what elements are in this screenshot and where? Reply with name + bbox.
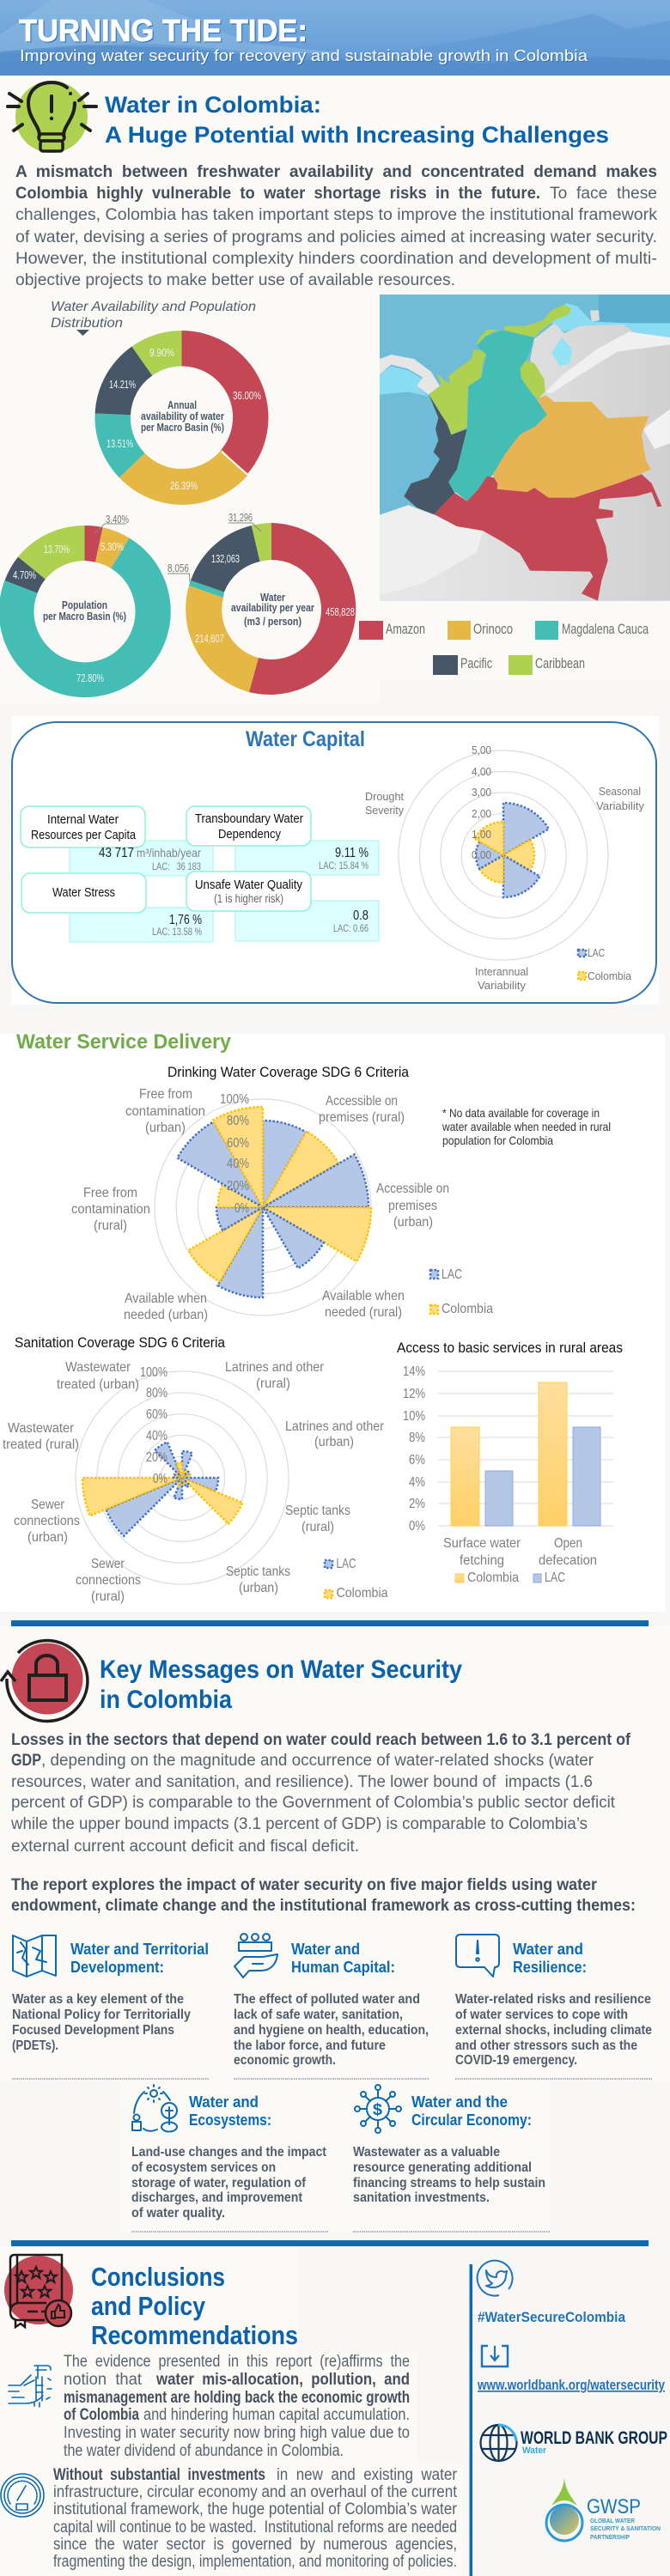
radar chart: sanitation: Wastewater <box>65 1360 131 1375</box>
heading: conclusions <box>91 2262 298 2350</box>
bar chart: access to basic services: 2% <box>409 1497 425 1511</box>
sidebar: links and logos <box>469 2261 667 2576</box>
basin: Amazon <box>434 474 661 601</box>
intro paragraph: A mismatch between freshwater availability and concentrated demand makes <box>15 163 657 181</box>
donut: annual availability of water: 14.21% <box>109 378 136 391</box>
conclusion paragraph one: and hindering human capital accumulation. <box>143 2406 410 2424</box>
card: water and ecosystems: of water quality. <box>131 2206 225 2221</box>
icon: download <box>482 2346 508 2366</box>
icon: book with stars <box>4 2255 73 2327</box>
card: transboundary water dependency <box>186 806 379 875</box>
card: unsafe water quality: Unsafe Water Quality <box>195 878 302 892</box>
card: water and resilience: Water and <box>513 1941 583 1958</box>
radar chart: water capital: Interannual <box>475 965 528 978</box>
radar chart: sanitation: Sewer <box>31 1498 65 1512</box>
card: water and the circular economy: $ <box>373 2101 382 2119</box>
heading: key messages: Key Messages on Water Security <box>100 1656 462 1684</box>
icon: gauge <box>1 2474 44 2517</box>
icon: alert speech bubble <box>456 1935 499 1977</box>
bar chart: access to basic services: LAC <box>545 1571 565 1585</box>
header banner <box>0 0 670 76</box>
radar chart: sanitation <box>3 1360 388 1604</box>
radar chart: sanitation: 0% <box>153 1472 168 1486</box>
radar chart: drinking water <box>71 1087 493 1322</box>
donut: annual availability of water: 36.00% <box>233 389 261 402</box>
card: water and territorial development: Water as a key element of the <box>12 1992 184 2007</box>
intro paragraph: Colombia highly vulnerable to water shortage risks in the future. <box>15 185 540 203</box>
heading: water in Colombia: Water in Colombia: <box>105 92 321 118</box>
card: unsafe water quality <box>186 872 379 941</box>
card: water and resilience <box>455 1935 652 2079</box>
note: no data <box>442 1106 611 1147</box>
radar chart: sanitation: connections <box>14 1514 80 1528</box>
radar chart: water capital: LAC <box>588 946 605 959</box>
radar chart: drinking water: (urban) <box>145 1121 186 1135</box>
card: water stress: LAC: 13.58 % <box>152 926 202 938</box>
card: water and territorial development: (PDETs). <box>12 2038 58 2053</box>
subtitle: Improving water security for recovery and sustainable growth in Colombia <box>20 47 588 64</box>
radar chart: sanitation: Septic tanks <box>226 1564 290 1579</box>
card: transboundary water dependency: Dependency <box>218 827 281 841</box>
bar chart: access to basic services: Colombia <box>467 1571 519 1585</box>
icon: ecosystem cycle <box>132 2085 177 2131</box>
card: internal water resources: LAC: 36 183 <box>152 860 201 872</box>
radar chart: drinking water: needed (urban) <box>124 1308 208 1322</box>
intro paragraph: To face these <box>550 185 657 203</box>
heading: water service delivery: Water Service Delivery <box>16 1030 232 1054</box>
radar chart: water capital <box>365 744 645 992</box>
card: water and territorial development: Focused Development Plans <box>12 2023 174 2038</box>
bar chart: access to basic services <box>403 1364 613 1585</box>
basin: Magdalena Cauca <box>448 331 547 501</box>
key messages paragraph: while the upper bound impacts (3.1 percent of GDP) is comparable to Colombia’s <box>10 1815 588 1833</box>
radar chart: drinking water: Available when <box>125 1291 207 1306</box>
radar chart: drinking water: Free from <box>139 1087 192 1102</box>
donut: population per macro basin: 5.30% <box>100 540 124 553</box>
card: water and ecosystems <box>131 2085 328 2232</box>
conclusion paragraph one: the water dividend of abundance in Colombia. <box>64 2442 344 2460</box>
conclusion paragraph two: Without substantial investments <box>53 2466 265 2484</box>
map: Colombia macro basins <box>380 295 670 601</box>
radar chart: drinking water: 0% <box>234 1201 249 1216</box>
key messages paragraph <box>10 1731 631 1856</box>
bar chart: access to basic services: fetching <box>460 1553 504 1568</box>
donut: population per macro basin: Population <box>62 598 107 611</box>
radar chart: sanitation: 20% <box>146 1450 168 1465</box>
radar chart: drinking water: Accessible on <box>326 1094 398 1109</box>
note: no data: water available when needed in rural <box>442 1120 611 1133</box>
radar chart: water capital: 5,00 <box>472 744 491 756</box>
logo: World Bank Group <box>481 2425 667 2461</box>
card: water and ecosystems: Ecosystems: <box>189 2111 271 2129</box>
logo: GWSP: PARTNERSHIP <box>590 2535 630 2541</box>
radar chart: sanitation: 80% <box>146 1386 168 1400</box>
donut: water availability per year: 8,056 <box>168 562 189 574</box>
icon: map <box>13 1935 56 1977</box>
card: water and territorial development: Development: <box>70 1959 164 1976</box>
radar chart: water capital: Drought <box>365 790 404 803</box>
radar chart: drinking water: Free from <box>83 1186 137 1200</box>
radar chart: water capital: Variability <box>596 799 645 812</box>
conclusion paragraph two: since the water sector is governed by numerous agencies, <box>53 2536 457 2554</box>
card: water and ecosystems: storage of water, regulation of <box>131 2176 307 2190</box>
card: internal water resources: m³/inhab/year <box>137 846 201 860</box>
card: transboundary water dependency: 9.11 % <box>335 846 368 860</box>
conclusion paragraph one: mismanagement are holding back the economic growth <box>64 2389 410 2407</box>
card: water and human capital: Water and <box>291 1941 360 1958</box>
logo: GWSP: SECURITY & SANITATION <box>590 2526 661 2532</box>
card: water and the circular economy: resource generating additional <box>353 2160 532 2175</box>
key messages paragraph: percent of GDP) is comparable to the Government of Colombia’s public sector deficit <box>11 1794 616 1812</box>
card: water and territorial development <box>12 1935 209 2079</box>
card: water and the circular economy: financing streams to help sustain <box>353 2176 545 2190</box>
icon: twitter <box>478 2261 513 2296</box>
radar chart: drinking water: 20% <box>227 1179 249 1194</box>
radar chart: water capital: Colombia <box>588 969 632 982</box>
radar chart: sanitation: (urban) <box>27 1530 68 1545</box>
card: water and human capital: The effect of polluted water and <box>234 1992 420 2007</box>
donut: annual availability of water: per Macro Basin (%) <box>141 421 224 434</box>
intro paragraph: objective projects to make better use of available resources. <box>15 271 455 289</box>
radar chart: drinking water: 40% <box>227 1157 249 1171</box>
radar chart: drinking water: contamination <box>71 1202 150 1217</box>
icon: people and hand <box>234 1934 277 1978</box>
panel: water capital <box>12 716 659 1005</box>
icon: hand washing <box>9 2366 52 2407</box>
card: water and the circular economy: Water and the <box>411 2093 508 2111</box>
heading: conclusions: and Policy <box>91 2291 206 2321</box>
radar chart: drinking water: (urban) <box>393 1215 433 1230</box>
bar chart: access to basic services: Open <box>554 1536 582 1551</box>
card: water and human capital: Human Capital: <box>291 1959 395 1976</box>
icon: circular economy <box>355 2085 401 2133</box>
icon: lightbulb <box>8 81 96 153</box>
card: water and resilience: COVID-19 emergency. <box>455 2053 577 2068</box>
donut: population per macro basin: 3.40% <box>106 513 129 526</box>
panel: key messages <box>0 1620 670 2233</box>
key messages paragraph: resources, water and sanitation, and resilience). The lower bound of impacts (1.6 <box>11 1773 593 1791</box>
heading: conclusions: Recommendations <box>91 2320 298 2350</box>
bar chart: access to basic services: 0% <box>409 1519 425 1534</box>
card: water stress: 1,76 % <box>169 913 202 927</box>
card: water stress: Water Stress <box>52 885 115 900</box>
key messages paragraph: GDP <box>11 1752 41 1770</box>
note: no data: population for Colombia <box>442 1133 553 1147</box>
card: water and human capital: the labor force, and future <box>234 2038 386 2053</box>
card: water and human capital: economic growth. <box>234 2053 336 2068</box>
heading: key messages: in Colombia <box>100 1686 232 1714</box>
hashtag: #WaterSecureColombia <box>478 2309 625 2325</box>
card: unsafe water quality: 0.8 <box>353 908 368 923</box>
donut: population per macro basin: 4.70% <box>13 568 36 581</box>
intro paragraph: challenges, Colombia has taken important steps to improve the institutional framework <box>15 206 658 224</box>
bar chart: access to basic services: defecation <box>539 1553 597 1568</box>
radar chart: sanitation: (rural) <box>91 1589 125 1604</box>
radar chart: drinking water: 60% <box>227 1136 249 1151</box>
donut: population per macro basin <box>0 513 171 697</box>
heading: conclusions: Conclusions <box>91 2262 225 2292</box>
chart title: access to basic services: Access to basic services in rural areas <box>397 1340 623 1356</box>
radar chart: sanitation: 40% <box>146 1429 168 1443</box>
radar chart: sanitation: (rural) <box>302 1520 334 1534</box>
map legend: Orinoco <box>473 621 513 637</box>
bar chart: access to basic services: Surface water <box>443 1536 521 1551</box>
heading: key messages <box>100 1656 462 1714</box>
title: TURNING THE TIDE: <box>19 13 308 48</box>
donut: annual availability of water: 13.51% <box>107 437 133 450</box>
donut: water availability per year: 31,296 <box>228 511 253 524</box>
card: water and ecosystems: Water and <box>189 2093 259 2111</box>
card: water and human capital: lack of safe water, sanitation, <box>234 2008 403 2022</box>
card: water and the circular economy: Wastewater as a valuable <box>353 2145 500 2160</box>
panel: water service delivery <box>0 1030 665 1612</box>
radar chart: sanitation: Septic tanks <box>285 1504 350 1518</box>
radar chart: sanitation: connections <box>76 1573 141 1588</box>
conclusion paragraph two: capital will continue to be wasted. Institutional reforms are needed <box>53 2518 457 2537</box>
donut: annual availability of water <box>94 331 268 505</box>
donut: water availability per year: 132,063 <box>211 552 240 565</box>
card: water and human capital <box>234 1934 429 2079</box>
radar chart: sanitation: LAC <box>337 1557 356 1571</box>
intro paragraph: of water, devising a series of programs and policies aimed at increasing water security. <box>15 228 657 246</box>
card: water and ecosystems: discharges, and improvement <box>131 2190 303 2205</box>
key messages paragraph: , depending on the magnitude and occurrence of water-related shocks (water <box>41 1752 594 1770</box>
chart title: drinking water: Drinking Water Coverage SDG 6 Criteria <box>168 1064 410 1080</box>
donut: population per macro basin: 72.80% <box>76 671 104 684</box>
radar chart: sanitation: Wastewater <box>8 1421 75 1436</box>
radar chart: water capital: 3,00 <box>472 786 491 799</box>
panel: conclusions and policy recommendations <box>0 2240 649 2576</box>
donut: annual availability of water: availability of water <box>141 410 224 422</box>
themes intro: endowment, climate change and the institutional framework as cross-cutting themes: <box>11 1897 636 1915</box>
radar chart: sanitation: Latrines and other <box>225 1360 325 1375</box>
radar chart: drinking water: contamination <box>125 1104 205 1119</box>
donut: water availability per year: Water <box>260 591 285 604</box>
radar chart: drinking water: Available when <box>322 1289 405 1303</box>
intro paragraph: However, the institutional complexity hinders coordination and development of multi- <box>15 250 657 268</box>
key messages paragraph: Losses in the sectors that depend on water could reach between 1.6 to 3.1 percent of <box>11 1731 631 1749</box>
radar chart: water capital: Variability <box>478 979 527 992</box>
conclusion paragraph one: Investing in water security now bring high value due to <box>64 2424 410 2442</box>
basin: Pacific <box>404 395 467 514</box>
chart caption: Distribution <box>51 316 123 331</box>
conclusion paragraph one <box>64 2353 410 2460</box>
map legend <box>359 621 649 675</box>
card: internal water resources: Internal Water <box>47 812 119 827</box>
radar chart: sanitation: (rural) <box>256 1376 290 1391</box>
conclusion paragraph two: in new and existing water <box>277 2466 458 2484</box>
radar chart: sanitation: Latrines and other <box>285 1419 385 1434</box>
radar chart: sanitation: Colombia <box>337 1586 388 1601</box>
conclusion paragraph two <box>53 2466 458 2571</box>
donut: water availability per year: availability per year <box>231 601 314 614</box>
conclusion paragraph one: water mis-allocation, pollution, and <box>155 2371 410 2389</box>
conclusion paragraph one: of Colombia <box>64 2406 139 2424</box>
donut: water availability per year: 214,607 <box>195 632 224 645</box>
bar chart: access to basic services: 4% <box>409 1475 425 1490</box>
map legend: Caribbean <box>535 655 585 671</box>
radar chart: drinking water: 80% <box>227 1114 249 1128</box>
radar chart: water capital: 4,00 <box>472 765 491 778</box>
logo: GWSP: GLOBAL WATER <box>590 2518 635 2524</box>
bar chart: access to basic services: 6% <box>409 1453 425 1467</box>
card: water and resilience: Water-related risks and resilience <box>455 1992 651 2007</box>
conclusion paragraph two: institutional framework, the huge potential of Colombia’s water <box>53 2500 458 2518</box>
radar chart: water capital: 2,00 <box>472 807 491 820</box>
card: unsafe water quality: (1 is higher risk) <box>214 891 283 905</box>
key messages paragraph: external current account deficit and fiscal deficit. <box>11 1838 359 1856</box>
radar chart: sanitation: 60% <box>146 1407 168 1422</box>
logo: GWSP <box>546 2477 661 2541</box>
radar chart: drinking water: (rural) <box>94 1218 127 1233</box>
radar chart: drinking water: premises (rural) <box>319 1110 405 1125</box>
card: water and ecosystems: Land-use changes and the impact <box>131 2145 327 2160</box>
basin: Orinoco <box>493 395 651 498</box>
card: internal water resources: Resources per Capita <box>31 828 137 842</box>
radar chart: water capital: 0,00 <box>472 848 491 861</box>
radar chart: sanitation: (urban) <box>314 1435 354 1449</box>
card: internal water resources: 43 717 <box>99 846 134 860</box>
donut: population per macro basin: 13.70% <box>44 543 70 556</box>
card: water and ecosystems: of ecosystem services on <box>131 2160 276 2175</box>
radar chart: drinking water: needed (rural) <box>325 1305 402 1320</box>
card: water and territorial development: Water and Territorial <box>70 1941 209 1958</box>
note: no data: * No data available for coverage in <box>442 1106 600 1120</box>
basin: Caribbean <box>429 305 571 434</box>
card: water and human capital: and hygiene on health, education, <box>234 2023 429 2038</box>
card: water and the circular economy: sanitation investments. <box>353 2190 490 2205</box>
chart caption: Water Availability and Population <box>51 300 256 314</box>
map legend: Amazon <box>386 621 425 637</box>
heading: water in Colombia: A Huge Potential with Increasing Challenges <box>105 122 609 148</box>
bar chart: access to basic services: 10% <box>403 1409 425 1424</box>
card: water and territorial development: National Policy for Territorially <box>12 2008 191 2022</box>
radar chart: water capital: 1,00 <box>472 828 491 841</box>
conclusion paragraph one: The evidence presented in this report (re)affirms the <box>64 2353 410 2371</box>
radar chart: sanitation: Sewer <box>91 1557 125 1571</box>
radar chart: drinking water: Accessible on <box>376 1182 449 1196</box>
themes intro: The report explores the impact of water security on five major fields using water <box>11 1876 598 1894</box>
heading: water capital: Water Capital <box>246 727 365 751</box>
bar chart: access to basic services: 14% <box>403 1364 425 1379</box>
conclusion paragraph one: notion that <box>64 2371 143 2389</box>
donut: annual availability of water: 26.39% <box>170 479 198 492</box>
conclusion paragraph two: fragmenting the design, implementation, and monitoring of policies. <box>53 2553 457 2571</box>
card: transboundary water dependency: LAC: 15.84 % <box>319 860 368 872</box>
radar chart: drinking water: Colombia <box>442 1302 493 1316</box>
card: unsafe water quality: LAC: 0.66 <box>333 922 368 934</box>
radar chart: drinking water: premises <box>388 1199 437 1213</box>
card: transboundary water dependency: Transboundary Water <box>195 811 303 826</box>
chart caption <box>51 300 256 336</box>
radar chart: water capital: Severity <box>365 804 404 817</box>
donut: water availability per year: 458,828 <box>326 605 355 618</box>
radar chart: drinking water: 100% <box>220 1092 249 1107</box>
donut: water availability per year <box>168 511 356 695</box>
card: water and resilience: Resilience: <box>513 1959 587 1976</box>
bar chart: access to basic services: 12% <box>403 1387 425 1401</box>
logo: World Bank Group: Water <box>522 2445 547 2456</box>
icon: lock <box>1 1641 88 1722</box>
intro paragraph <box>15 163 658 289</box>
bar chart: access to basic services: 8% <box>409 1431 425 1445</box>
card: water and the circular economy: Circular Economy: <box>411 2111 532 2129</box>
radar chart: drinking water: LAC <box>442 1267 462 1282</box>
card: internal water resources <box>21 806 213 876</box>
radar chart: sanitation: (urban) <box>239 1581 278 1595</box>
logo: GWSP: GWSP <box>587 2495 641 2518</box>
themes intro <box>11 1876 636 1915</box>
map legend: Pacific <box>460 655 492 671</box>
radar chart: water capital: Seasonal <box>599 785 641 798</box>
heading: water in Colombia <box>105 92 609 148</box>
conclusion paragraph two: infrastructure, circular economy and an overhaul of the current <box>53 2483 458 2501</box>
radar chart: sanitation: 100% <box>140 1365 168 1380</box>
card: water and the circular economy <box>353 2085 550 2232</box>
card: water stress <box>21 873 213 942</box>
panel: water in Colombia <box>0 76 670 703</box>
donut: water availability per year: (m3 / person) <box>244 615 302 628</box>
radar chart: sanitation: treated (urban) <box>57 1377 139 1392</box>
donut: population per macro basin: per Macro Basin (%) <box>43 610 126 623</box>
card: water and resilience: and other stressors such as the <box>455 2038 637 2053</box>
chart title: sanitation: Sanitation Coverage SDG 6 Criteria <box>15 1334 225 1351</box>
donut: annual availability of water: Annual <box>168 398 197 411</box>
card: water and resilience: of water services to cope with <box>455 2008 628 2022</box>
radar chart: sanitation: treated (rural) <box>3 1437 79 1452</box>
donut: annual availability of water: 9.90% <box>149 346 174 359</box>
